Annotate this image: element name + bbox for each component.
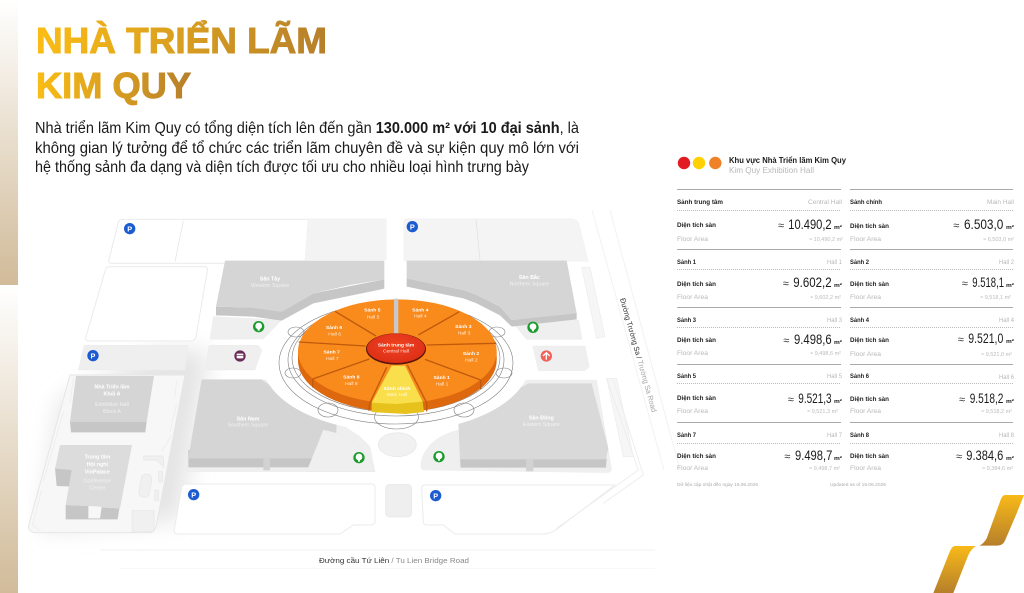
road label: Truong Sa: Đường Trường Sa / Trường Sa Road [618, 297, 659, 413]
conference centre [55, 445, 132, 519]
conference centre: Hội nghị [87, 462, 109, 468]
icon: parking [87, 350, 99, 361]
card: hall 5 [677, 364, 842, 415]
card: main hall: 6.503,0 [964, 216, 1003, 232]
central north block [305, 218, 387, 260]
card: central hall: Sảnh trung tâm [677, 199, 723, 206]
exhibition hall block A: Block A [103, 409, 121, 415]
card: central hall: Floor Area [677, 236, 708, 243]
south square building: Sân Nam [237, 416, 260, 422]
card: main hall: m² [1006, 224, 1014, 231]
card: hall 1: Floor Area [677, 294, 708, 301]
intro text block [35, 120, 579, 176]
card: hall 7: 9.498,7 [795, 447, 832, 463]
card: hall 4: Hall 4 [999, 317, 1014, 324]
update note [677, 482, 886, 487]
icon: shop [234, 350, 246, 362]
card: hall 2: Hall 2 [999, 259, 1014, 266]
hall labels [323, 307, 479, 398]
card: hall 8: 9.384,6 [966, 447, 1003, 463]
icon: parking [188, 489, 199, 500]
card: central hall: m² [834, 224, 842, 231]
icon: parking: P [91, 351, 96, 360]
north-east quadrant [403, 218, 633, 457]
parking strip [78, 345, 188, 370]
card: hall 7: ≈ [784, 451, 790, 463]
icon: tree east [433, 451, 445, 462]
card: hall 4: ≈ [958, 334, 964, 346]
update note: Dữ liệu cập nhật đến ngày 15.06.2025 [677, 482, 758, 487]
north-west quadrant [78, 218, 387, 370]
central hall [366, 333, 426, 365]
card: hall 3: Hall 3 [827, 317, 842, 324]
card: main hall: Main Hall [987, 199, 1015, 206]
round fountain [378, 433, 416, 457]
card: hall 1 [677, 250, 842, 301]
card: main hall: ≈ [953, 220, 959, 232]
exhibition hall block A: Khối A [104, 391, 121, 398]
card: hall 6: ≈ [959, 394, 965, 406]
left decorative band [0, 0, 18, 593]
parking lot north-east [403, 218, 589, 262]
update note: Updated as of 15.06.2025 [830, 482, 886, 487]
top gap [394, 299, 398, 333]
card: hall 8: ≈ 9,384,6 m² [982, 466, 1013, 472]
hall labels: Sảnh 2 [463, 351, 479, 357]
east square building: Sân Đông [529, 416, 554, 422]
card: hall 7: Hall 7 [827, 432, 842, 439]
card: hall 7 [677, 422, 842, 472]
hall labels: Sảnh 7 [323, 350, 340, 356]
side strip [582, 267, 605, 338]
road label: Tu Lien: Đường cầu Tứ Liên / Tu Lien Bridge Road [319, 556, 469, 565]
icon: tree south [353, 452, 365, 463]
card: hall 4: Sảnh 4 [850, 317, 869, 324]
card: hall 3 [677, 308, 842, 357]
card: hall 4 [850, 308, 1014, 358]
card: hall 8: Hall 8 [999, 432, 1014, 439]
card: hall 8: ≈ [956, 451, 962, 463]
card: hall 8: Diện tích sàn [850, 453, 889, 460]
card: hall 4: m² [1006, 338, 1014, 345]
corner gold ribbons [933, 495, 1024, 593]
parking lot north-west [109, 219, 308, 263]
card: hall 3: 9.498,6 [794, 331, 832, 347]
parking lot south-east [422, 485, 615, 534]
north square building [407, 261, 577, 327]
card: hall 3: Sảnh 3 [677, 317, 696, 324]
exhibition hall block A [70, 376, 154, 432]
conference centre: Conference [84, 479, 111, 485]
card: hall 3: Diện tích sàn [677, 337, 716, 344]
card: main hall: Sảnh chính [850, 199, 882, 206]
west square building [216, 261, 384, 321]
hall labels: Hall 4 [414, 314, 427, 320]
title: KIM QUY [36, 65, 191, 106]
sector separators [299, 311, 496, 411]
south square building [188, 379, 337, 470]
card: hall 7: Sảnh 7 [677, 432, 696, 439]
card: hall 5: Hall 5 [827, 373, 842, 380]
icon: parking: P [127, 224, 132, 233]
card: hall 8: m² [1006, 455, 1014, 462]
south-east quadrant [307, 378, 643, 534]
card: hall 6: Floor Area [850, 408, 881, 415]
card: main hall: ≈ 6,503,0 m² [983, 237, 1014, 243]
card: hall 1: 9.602,2 [793, 274, 832, 290]
hall labels: Sảnh 1 [433, 375, 450, 381]
large white lot [86, 267, 207, 341]
map ground shadow [40, 350, 210, 530]
title: NHÀ TRIỂN LÃM [36, 19, 327, 61]
floor area table [677, 190, 1015, 472]
hall labels: Central Hall [383, 349, 409, 355]
card: hall 2 [850, 250, 1014, 301]
purple service pad [205, 345, 262, 370]
card: hall 5: Floor Area [677, 408, 708, 415]
north square building: Sân Bắc [519, 274, 540, 281]
card: hall 2: Floor Area [850, 294, 881, 301]
hall labels: Sảnh trung tâm [378, 342, 415, 348]
icon: tree north [527, 322, 539, 333]
icon: tree west [253, 321, 264, 332]
east square base [421, 380, 612, 473]
card: hall 3: ≈ [783, 335, 789, 347]
legend: Khu vực Nhà Triển lãm Kim Quy [729, 155, 846, 165]
icon: parking: P [433, 491, 438, 500]
hall labels: Hall 2 [465, 358, 478, 364]
wheel extrusion [298, 309, 497, 412]
card: hall 2: Diện tích sàn [850, 281, 889, 288]
card: hall 4: 9.521,0 [968, 330, 1003, 346]
card: central hall [677, 190, 843, 243]
hall labels: Hall 7 [326, 356, 339, 362]
card: hall 8 [850, 422, 1014, 472]
card: main hall: Floor Area [850, 236, 881, 243]
icon: parking [124, 223, 135, 234]
card: hall 6: Diện tích sàn [850, 396, 889, 403]
card: hall 6 [850, 364, 1014, 415]
card: hall 5: Diện tích sàn [677, 395, 716, 402]
site map [28, 210, 680, 569]
card: hall 1: ≈ [783, 278, 789, 290]
card: hall 5: Sảnh 5 [677, 373, 696, 380]
card: hall 8: Sảnh 8 [850, 432, 869, 439]
card: main hall [850, 190, 1015, 243]
hall labels: Hall 8 [345, 381, 358, 387]
road lines [100, 210, 680, 569]
hall labels: Hall 6 [328, 332, 341, 338]
hall labels: Hall 1 [436, 382, 449, 388]
card: hall 2: 9.518,1 [972, 274, 1004, 290]
card: hall 2: Sảnh 2 [850, 259, 869, 266]
south square base [187, 380, 375, 472]
card: hall 5: m² [834, 398, 842, 405]
hall labels: Main Hall [387, 392, 407, 398]
card: hall 1: Sảnh 1 [677, 259, 696, 266]
east square building: Eastern Square [523, 422, 560, 428]
card: hall 3: Floor Area [677, 350, 708, 357]
ring walkway [279, 302, 513, 429]
card: hall 5: ≈ 9,521,3 m² [807, 409, 838, 415]
tree pad west [210, 317, 282, 339]
south square building: Southern Square [228, 423, 268, 429]
card: hall 6: ≈ 9,518,2 m² [981, 409, 1012, 415]
card: hall 5: 9.521,3 [798, 390, 832, 406]
card: hall 3: m² [834, 339, 842, 346]
exhibition hall block A: Nhà Triển lãm [95, 383, 130, 390]
card: hall 6: Sảnh 6 [850, 373, 869, 380]
conference centre: Center [89, 486, 106, 492]
conference centre: VinPalace [85, 470, 110, 476]
legend: Kim Quy Exhibition Hall [729, 165, 814, 175]
card: hall 4: Diện tích sàn [850, 337, 889, 344]
hall labels: Sảnh 3 [455, 324, 472, 330]
card: hall 1: m² [834, 282, 842, 289]
card: hall 6: 9.518,2 [970, 390, 1004, 406]
south-west quadrant [28, 375, 375, 534]
small central block [386, 484, 412, 517]
hall labels: Hall 3 [458, 330, 471, 336]
card: hall 7: Diện tích sàn [677, 453, 716, 460]
card: central hall: 10.490,2 [788, 216, 832, 232]
tree pad north [512, 320, 582, 339]
card: hall 2: m² [1006, 282, 1014, 289]
card: hall 1: ≈ 9,602,2 m² [810, 295, 841, 301]
exhibition hall block A: Exhibition Hall [95, 402, 129, 408]
card: hall 7: ≈ 9,498,7 m² [809, 466, 840, 472]
card: central hall: ≈ [778, 220, 784, 232]
hall labels: Hall 5 [367, 314, 380, 320]
wheel surface [298, 299, 497, 403]
icon: parking: P [191, 490, 196, 499]
west square building: Western Square [251, 283, 289, 289]
north square building: Northern Square [510, 281, 549, 287]
parking lot south-west [174, 484, 375, 534]
intro text block: không gian lý tưởng để tổ chức các triển lãm chuyên đề và sự kiện quy mô lớn với [35, 140, 579, 157]
red service pad [533, 346, 589, 371]
icon: entrance [541, 350, 552, 362]
intro text block: Nhà triển lãm Kim Quy có tổng diện tích lên đến gần 130.000 m² với 10 đại sảnh, là [35, 120, 579, 137]
side strip lower [607, 378, 633, 457]
hall labels: Sảnh chính [384, 386, 410, 392]
hall labels: Sảnh 5 [364, 308, 381, 314]
card: hall 6: m² [1006, 398, 1014, 405]
card: hall 8: Floor Area [850, 465, 881, 472]
exhibition hall wheel [298, 299, 497, 414]
hall labels: Sảnh 8 [343, 374, 360, 380]
card: central hall: Diện tích sàn [677, 222, 716, 229]
card: hall 3: ≈ 9,498,6 m² [810, 351, 841, 357]
conference centre: Trung tâm [84, 454, 110, 460]
card: main hall: Diện tích sàn [850, 223, 889, 230]
card: central hall: Central Hall [808, 199, 843, 206]
icon: parking: P [410, 222, 415, 231]
card: hall 2: ≈ [962, 278, 968, 290]
west square building: Sân Tây [260, 276, 280, 282]
plaza around hall [262, 292, 530, 432]
card: hall 7: m² [834, 455, 842, 462]
block A site frame [28, 375, 185, 533]
card: central hall: ≈ 10,490,2 m² [809, 237, 843, 243]
main hall sector [372, 366, 423, 404]
title [36, 19, 327, 106]
card: hall 6: Hall 6 [999, 374, 1014, 381]
card: hall 2: ≈ 9,518,1 m² [980, 295, 1011, 301]
hall labels: Sảnh 4 [412, 307, 429, 313]
hall labels: Sảnh 6 [326, 325, 342, 331]
card: hall 5: ≈ [788, 394, 794, 406]
card: hall 1: Hall 1 [827, 259, 842, 266]
small plaza shapes [132, 456, 164, 531]
card: hall 4: Floor Area [850, 351, 881, 358]
legend [678, 155, 846, 175]
card: hall 1: Diện tích sàn [677, 281, 716, 288]
icon: parking [430, 490, 441, 501]
intro text block: hệ thống sảnh đa dạng và diện tích được tối ưu cho nhiều loại hình trưng bày [35, 159, 529, 176]
main hall extrusion [372, 402, 424, 414]
card: hall 7: Floor Area [677, 465, 708, 472]
tree pad south [307, 430, 375, 472]
icon: parking [407, 221, 418, 232]
card: hall 4: ≈ 9,521,0 m² [981, 352, 1012, 358]
east square building [458, 383, 608, 471]
